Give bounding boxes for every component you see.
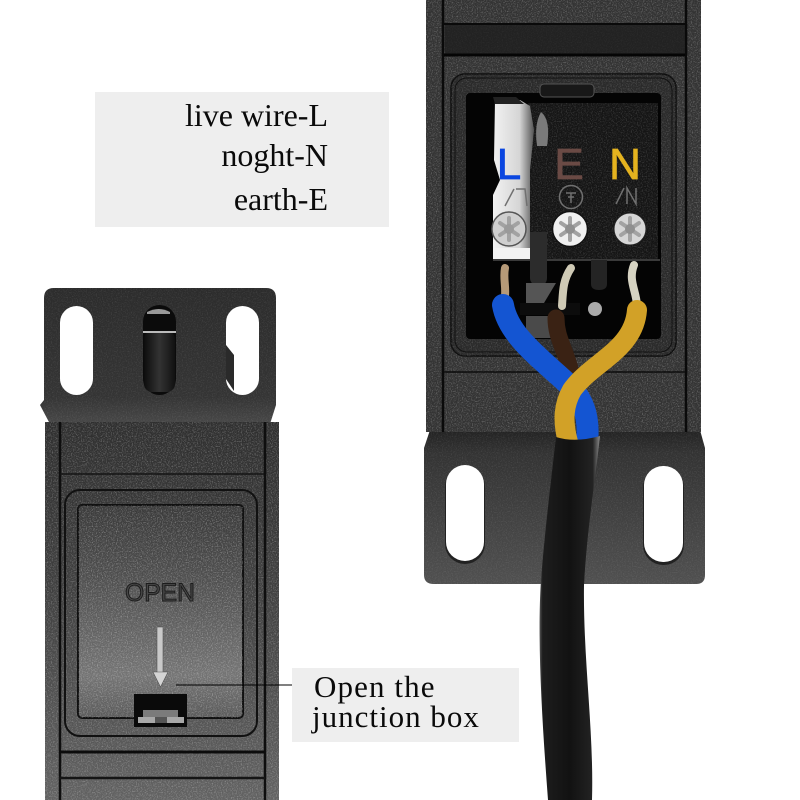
right mounting bracket xyxy=(424,430,705,584)
terminal screws xyxy=(492,212,646,246)
callout line two: junction box xyxy=(311,699,480,734)
terminal letter N: N xyxy=(609,140,641,189)
junction box cover xyxy=(65,490,257,736)
terminal letter L: L xyxy=(497,140,521,189)
legend line: live wire: live wire-L xyxy=(185,97,328,133)
stripped copper conductors xyxy=(504,265,637,306)
left unit body xyxy=(45,422,279,800)
panel: right unit, open junction box xyxy=(424,0,705,800)
right unit body xyxy=(426,0,701,432)
legend line: noght: noght-N xyxy=(221,137,328,173)
callout: open the junction box xyxy=(176,668,519,742)
middle bracket slot with ribbed part xyxy=(143,305,176,395)
terminal block xyxy=(493,97,660,338)
blue wire xyxy=(503,305,588,442)
brown wire xyxy=(556,318,573,382)
embossed OPEN label: OPEN xyxy=(125,579,195,607)
yellow wire xyxy=(565,310,637,442)
right bracket slot xyxy=(226,306,259,395)
callout panel: wire legend xyxy=(95,92,389,227)
right unit left slot xyxy=(445,465,485,564)
cover latch xyxy=(134,694,187,727)
left mounting bracket xyxy=(40,288,276,424)
left bracket slot xyxy=(60,306,93,395)
right unit right slot xyxy=(643,466,684,565)
terminal letter E: E xyxy=(554,140,584,189)
arrow: down to latch xyxy=(153,627,168,687)
legend line: earth: earth-E xyxy=(234,181,328,217)
panel: left unit, closed junction box xyxy=(40,288,279,800)
black power cable xyxy=(540,436,600,800)
terminal frame and window xyxy=(451,74,676,356)
callout line one: Open the xyxy=(314,669,436,704)
terminal symbols xyxy=(505,186,636,208)
